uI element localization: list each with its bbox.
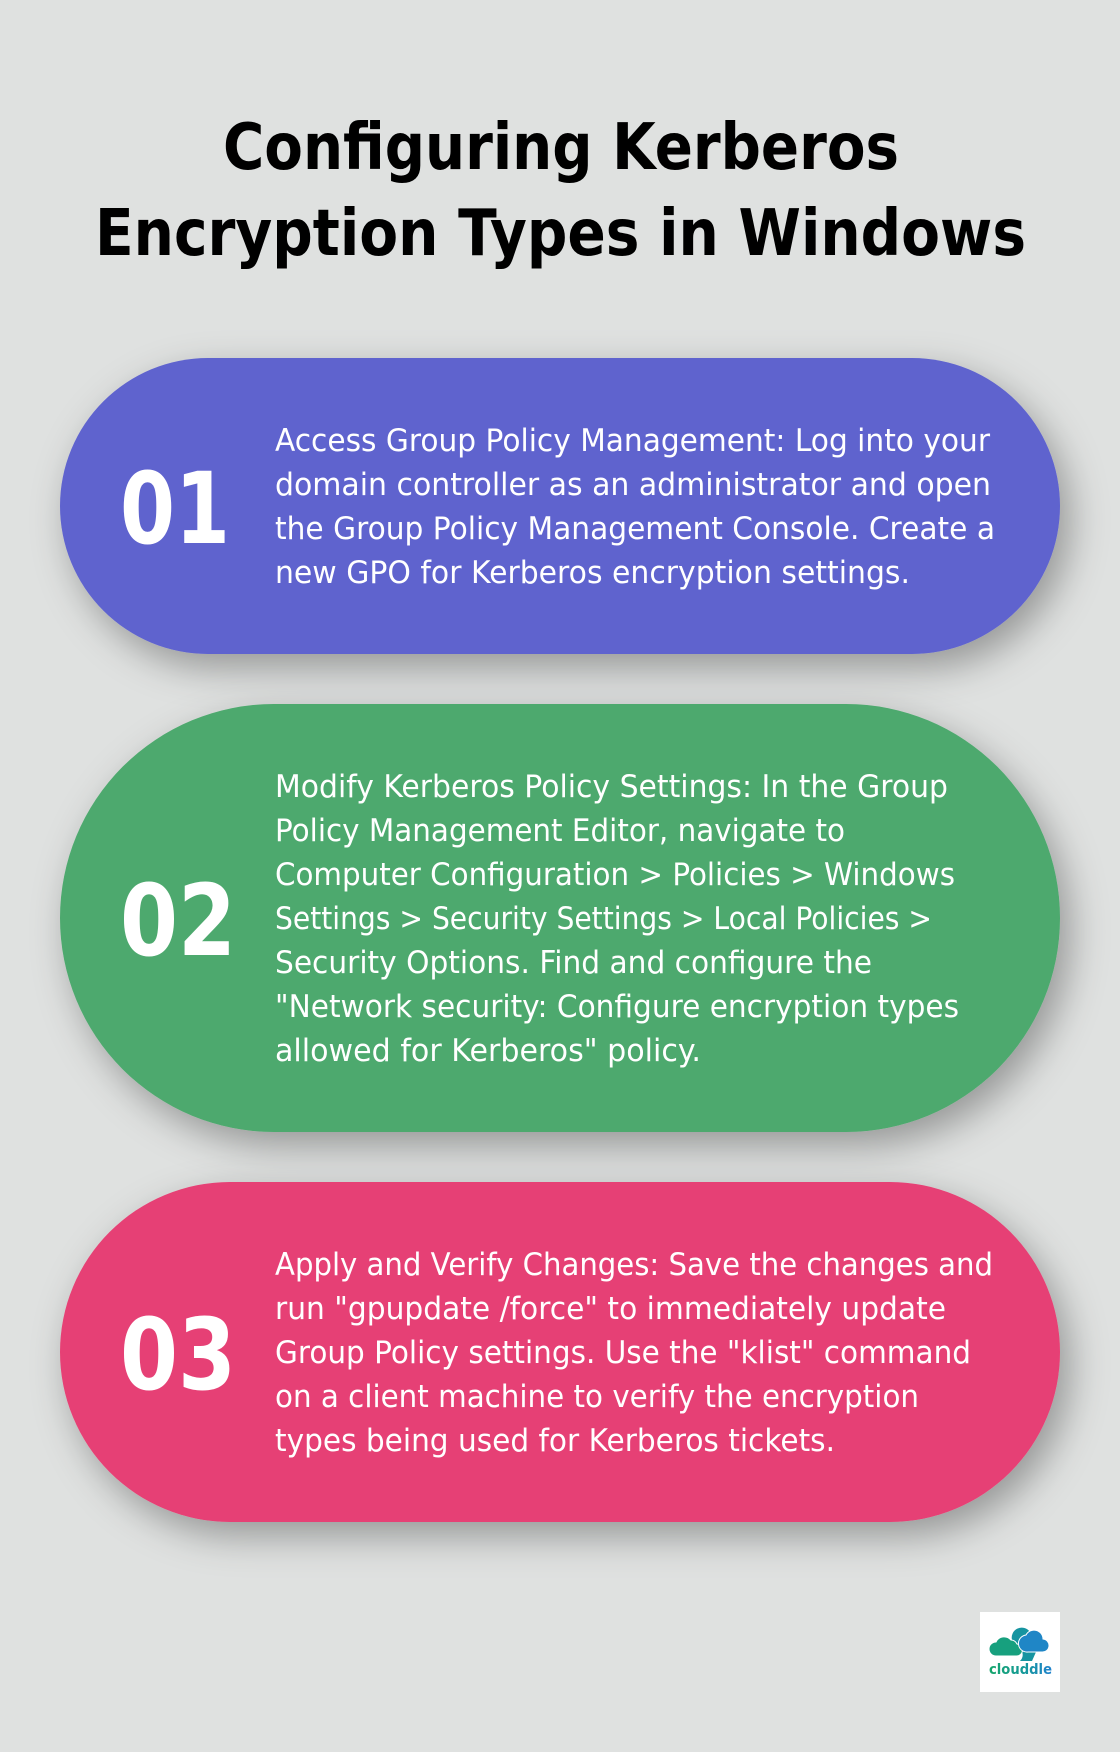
logo wordmark: clouddle [989, 1662, 1052, 1678]
text block: step 02 [275, 769, 959, 1069]
panel: step 02 [60, 704, 1060, 1132]
title [95, 111, 1026, 271]
text block: step 02: Settings > Security Settings > Local Policies > [275, 901, 932, 937]
text block: step 02: Security Options. Find and configure the [275, 945, 872, 981]
number 01: 01 [120, 452, 230, 567]
icon: clouds [989, 1628, 1049, 1661]
text block: step 01 [275, 423, 995, 591]
panel: step 01 [60, 358, 1060, 654]
pill background: step 01 [60, 358, 1060, 654]
text block: step 02: "Network security: Configure encryption types [275, 989, 959, 1025]
text block: step 03: types being used for Kerberos tickets. [275, 1423, 835, 1459]
text block: step 01: the Group Policy Management Console. Create a [275, 511, 995, 547]
text block: step 02: Modify Kerberos Policy Settings: In the Group [275, 769, 948, 805]
pill background: step 02 [60, 704, 1060, 1132]
text block: step 01: Access Group Policy Management: Log into your [275, 423, 990, 459]
text block: step 03: on a client machine to verify the encryption [275, 1379, 919, 1415]
text block: step 03: Group Policy settings. Use the "klist" command [275, 1335, 971, 1371]
text block: step 01: new GPO for Kerberos encryption settings. [275, 555, 910, 591]
title: Configuring Kerberos [223, 111, 899, 185]
number 02: 02 [120, 864, 236, 979]
logo: clouddle [980, 1612, 1060, 1692]
text block: step 03: Apply and Verify Changes: Save the changes and [275, 1247, 993, 1283]
text block: step 03 [275, 1247, 993, 1459]
number 03: 03 [120, 1298, 236, 1413]
text block: step 01: domain controller as an administrator and open [275, 467, 991, 503]
panel: step 03 [60, 1182, 1060, 1522]
title: Encryption Types in Windows [95, 197, 1026, 271]
text block: step 03: run "gpupdate /force" to immediately update [275, 1291, 946, 1327]
text block: step 02: Policy Management Editor, navigate to [275, 813, 845, 849]
pill background: step 03 [60, 1182, 1060, 1522]
text block: step 02: Computer Configuration > Policies > Windows [275, 857, 955, 893]
text block: step 02: allowed for Kerberos" policy. [275, 1033, 701, 1069]
